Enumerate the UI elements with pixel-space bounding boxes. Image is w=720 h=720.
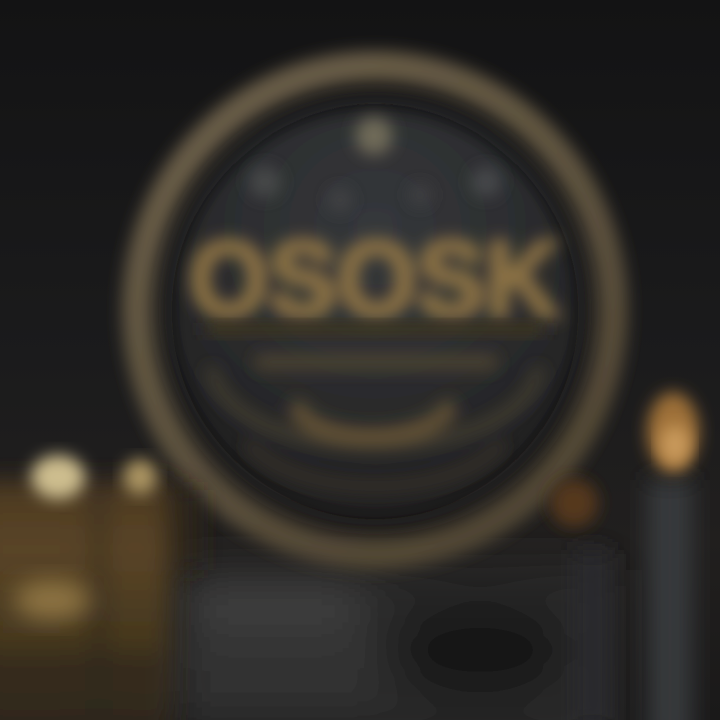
emblem main lettering: OSOSK — [189, 218, 559, 339]
table surface at bottom — [170, 570, 610, 720]
emblem inner disk — [165, 102, 585, 522]
small amber orb — [550, 479, 598, 527]
emblem outer ring — [137, 66, 613, 554]
glowing highlights on coin stack — [14, 455, 157, 620]
stars on disk — [249, 117, 501, 212]
lettering base band — [205, 322, 545, 336]
gold coin stack left — [0, 480, 200, 720]
emblem curved inscription lines — [212, 362, 538, 486]
candle right — [575, 392, 699, 720]
